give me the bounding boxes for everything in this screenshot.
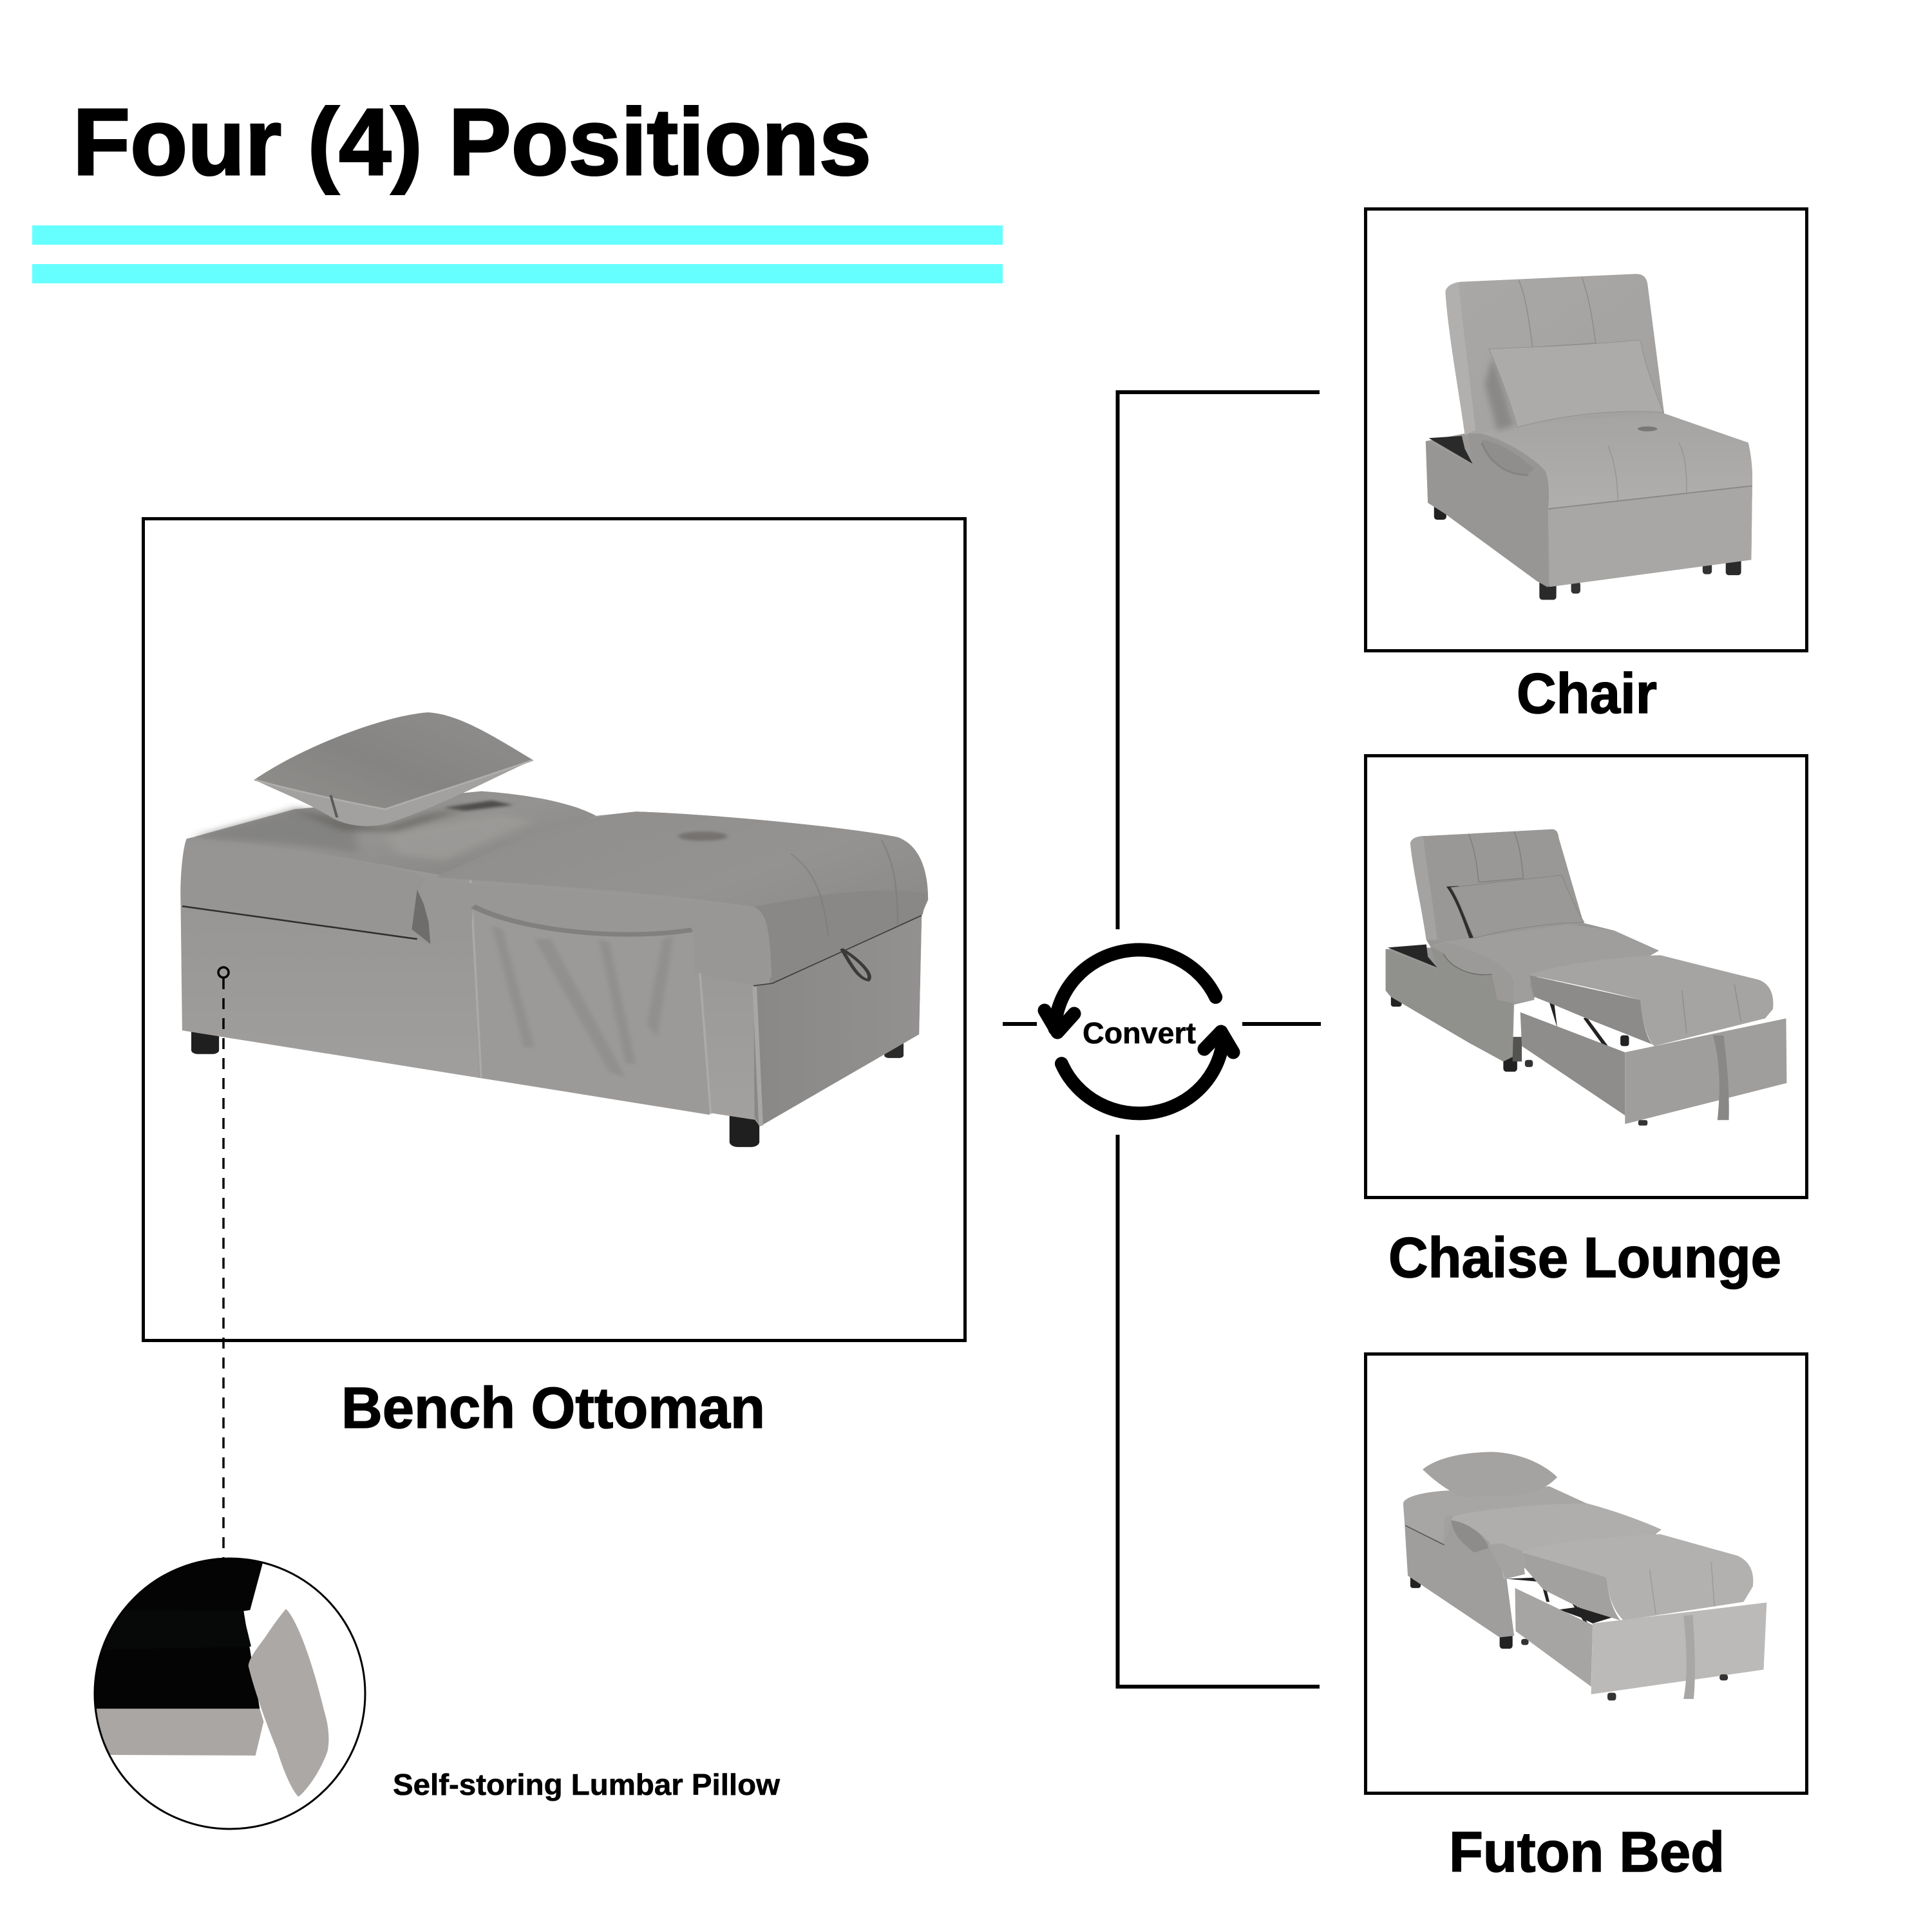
- illustration: futon bed: [1403, 1452, 1766, 1700]
- inset contents: [90, 1554, 328, 1797]
- label: self-storing lumbar pillow: Self-storing Lumbar Pillow: [393, 1768, 780, 1801]
- illustration: chair: [1426, 274, 1752, 600]
- illustration: bench ottoman sofa: [180, 712, 928, 1147]
- panel frame: [1365, 1354, 1807, 1793]
- inset ring: [95, 1558, 365, 1829]
- inset: self-storing lumbar pillow: [90, 1554, 365, 1829]
- panel: chaise lounge: [1365, 756, 1807, 1198]
- title underline bars: [32, 225, 1003, 283]
- label: chaise lounge: Chaise Lounge: [1388, 1226, 1781, 1289]
- panel: chair: [1365, 209, 1807, 650]
- panel frame: [1365, 209, 1807, 650]
- title: Four (4) Positions: [73, 90, 871, 195]
- panel frame: [1365, 756, 1807, 1198]
- label: convert: Convert: [1083, 1016, 1196, 1050]
- label: futon bed: Futon Bed: [1449, 1820, 1725, 1884]
- panel: bench ottoman: [143, 519, 965, 1341]
- connector lines: [1003, 392, 1321, 1687]
- panel: futon bed: [1365, 1354, 1807, 1793]
- illustration: chaise lounge: [1386, 829, 1786, 1126]
- panel frame: [143, 519, 965, 1341]
- dashed callout line: [218, 967, 229, 1560]
- label: bench ottoman: Bench Ottoman: [341, 1376, 765, 1441]
- label: chair: Chair: [1517, 661, 1657, 725]
- icon: convert cycle arrows: [1045, 950, 1233, 1113]
